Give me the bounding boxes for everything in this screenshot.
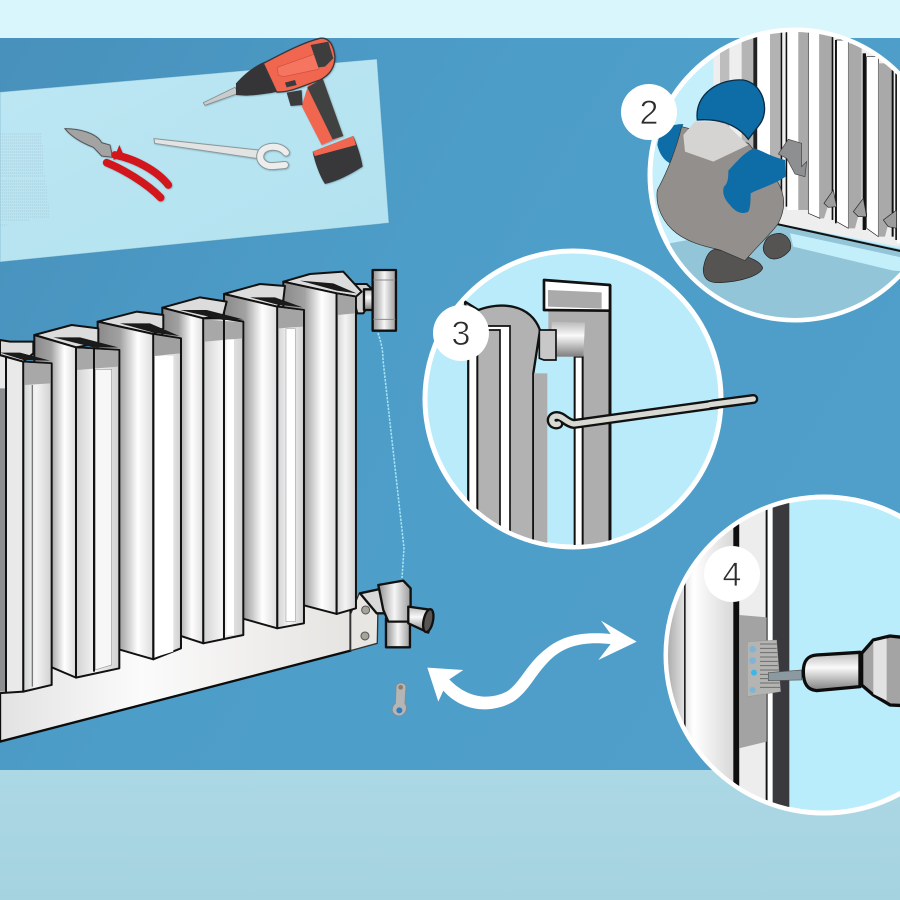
fin 1: [0, 340, 52, 693]
pipe connector: [552, 322, 585, 357]
driver shaft: [768, 670, 802, 681]
glove: [778, 139, 807, 177]
panel: step 4 circle: [666, 497, 900, 817]
double-headed arrow: [427, 621, 637, 709]
radiator edge strips: [668, 528, 734, 782]
step 3 badge: [433, 305, 489, 361]
fin 4: [162, 297, 243, 643]
radiator bars: [713, 30, 900, 252]
icon: cordless drill: [203, 38, 363, 184]
toothed clip: [747, 640, 781, 697]
fin 3: [98, 312, 181, 659]
circle background: [666, 497, 900, 813]
scene: hook tool at valve: [464, 278, 719, 545]
right arm: [723, 148, 786, 213]
step 4 badge: [704, 546, 760, 602]
left arm: [657, 124, 683, 163]
icon: pliers: [65, 129, 168, 198]
floor: [670, 225, 900, 318]
base rail: [0, 593, 351, 742]
step 2 badge: 2: [640, 94, 658, 132]
fin 6: [283, 272, 362, 614]
fin 2: [34, 325, 119, 678]
scene: driver on bracket screw: [667, 497, 900, 817]
fine print block: [0, 134, 49, 225]
mounting plate: [739, 615, 767, 748]
radiator: [0, 270, 435, 742]
step 4 badge: 4: [723, 556, 741, 594]
floor slab: [790, 233, 900, 272]
worker: [657, 80, 807, 283]
step 3 badge: 3: [452, 315, 470, 353]
blue screws: [749, 646, 757, 693]
icon: small key tag: [392, 683, 406, 716]
icon: wrench: [154, 139, 286, 166]
wall bracket: [351, 589, 378, 651]
panel: step 2 circle: [621, 30, 900, 337]
dashed connector line: [378, 333, 404, 578]
sheet: [0, 59, 389, 262]
circle background: [425, 251, 721, 547]
radiator column: [465, 302, 540, 547]
circle background: [650, 30, 900, 320]
bottom valve: [360, 581, 435, 647]
top pipe stub: [350, 284, 377, 313]
rod end outside circle: [710, 399, 753, 405]
bottom floor band: [0, 770, 900, 900]
step 2 badge: [621, 84, 677, 140]
driver body: [803, 652, 860, 691]
hook rod: [552, 399, 753, 424]
post: [548, 310, 610, 547]
driver collar: [862, 636, 900, 707]
hood: [697, 80, 765, 139]
panel: step 3 circle: [425, 251, 753, 547]
scene: worker at radiator: [653, 30, 900, 337]
overalls: [657, 127, 784, 261]
top band: [0, 0, 900, 38]
top valve: [364, 270, 396, 331]
collar: [683, 122, 748, 162]
fin 5: [224, 284, 304, 628]
bracket bolts: [361, 606, 370, 640]
boots: [703, 249, 763, 283]
post cap: [544, 280, 610, 311]
panel: tools sheet: [0, 38, 389, 262]
